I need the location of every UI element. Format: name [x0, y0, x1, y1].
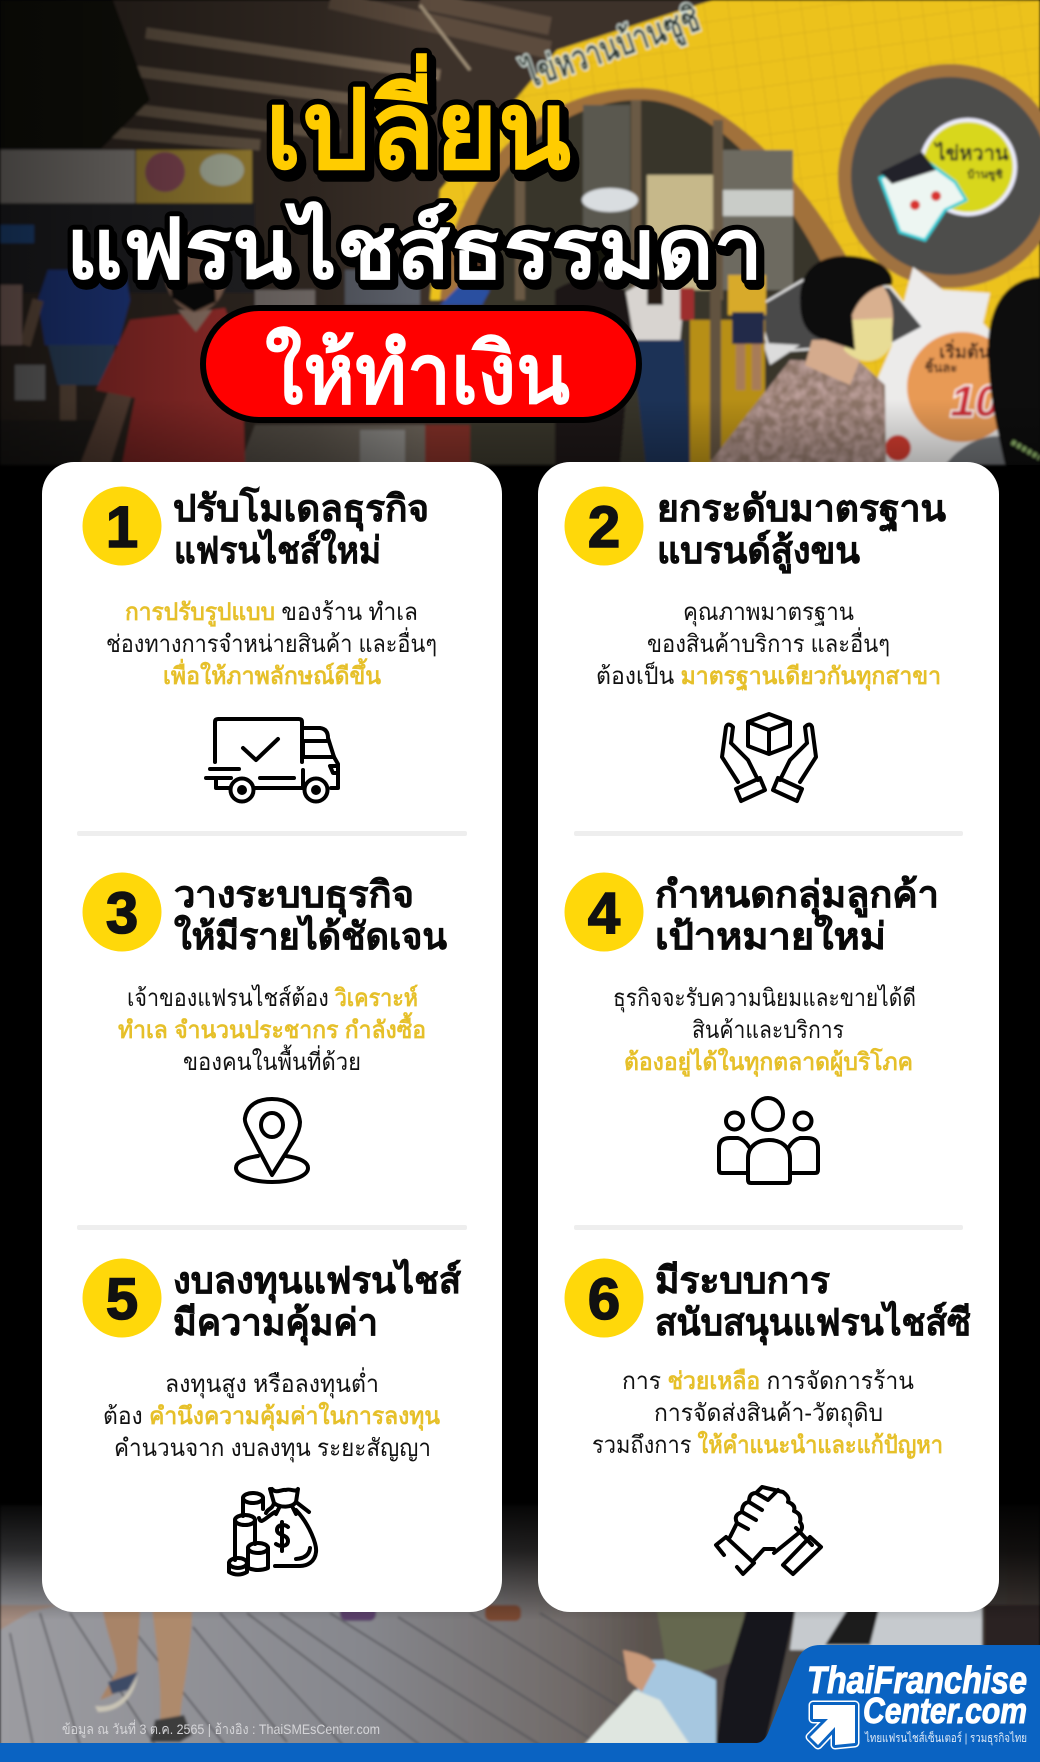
heading 6: มีระบบการ [655, 1260, 830, 1301]
number badge 6 [564, 1258, 644, 1338]
deck: walker's legs and sandals [95, 1605, 192, 1742]
number badge 1: 1 [106, 495, 138, 560]
background photo: wooden deck and legs [0, 1505, 1040, 1750]
body 4: สินค้าและบริการ [692, 1017, 844, 1044]
heading 4: กำหนดกลุ่มลูกค้า [655, 874, 939, 918]
heading 1: ปรับโมเดลธุรกิจ [173, 486, 429, 532]
body 6: การจัดส่งสินค้า-วัตถุดิบ [654, 1400, 883, 1428]
photo: yellow tiled wall [430, 0, 1040, 465]
photo: round sign: ไข่หวาน [933, 141, 1009, 165]
photo: dark haired person at right edge [945, 277, 1040, 465]
body 5: ต้อง คำนึงความคุ้มค่าในการลงทุน [103, 1401, 441, 1432]
icon: logo arrow [810, 1705, 855, 1745]
item 3 [82, 872, 447, 1182]
heading 2: แบรนด์สู้งขน [657, 530, 860, 574]
photo: man in blue [0, 270, 130, 437]
photo: arched entrance [440, 88, 860, 465]
photo: woman in yellow [728, 275, 766, 390]
number badge 6: 6 [588, 1267, 620, 1332]
body 4: ต้องอยู่ได้ในทุกตลาดผู้บริโภค [624, 1047, 913, 1078]
photo: floor [240, 425, 460, 465]
logo: ThaiFranchise Center.com [807, 1660, 1027, 1746]
heading 6: สนับสนุนแฟรนไชส์ซี [655, 1300, 971, 1346]
heading 4 [655, 874, 939, 957]
heading 3 [174, 874, 447, 957]
heading 4: เป้าหมายใหม่ [655, 914, 886, 957]
photo: cartoon standee: 10 [951, 377, 1000, 426]
item 6 [564, 1258, 971, 1574]
body 2: ของสินค้าบริการ และอื่นๆ [647, 627, 890, 658]
icon: hands holding box [722, 714, 816, 801]
photo: woman in white shirt [626, 275, 694, 465]
number badge 5 [82, 1258, 162, 1338]
photo top fade to black [0, 0, 1040, 570]
deck: right side clothing and bag [340, 1605, 1040, 1745]
title: แฟรนไชส์ธรรมดา: แฟรนไชส์ธรรมดา [66, 201, 763, 296]
body 4 [613, 984, 916, 1078]
body 5: คำนวนจาก งบลงทุน ระยะสัญญา [114, 1435, 431, 1463]
heading 3: ให้มีรายได้ชัดเจน [174, 914, 447, 957]
photo: round sign [838, 64, 1040, 288]
number badge 4 [564, 872, 644, 952]
item 2 [564, 486, 946, 801]
body 5 [103, 1367, 441, 1463]
body 1 [106, 599, 437, 690]
icon: delivery truck [206, 719, 338, 802]
body 4: ธุรกิจจะรับความนิยมและขายได้ดี [613, 984, 916, 1013]
icon: handshake [716, 1487, 821, 1574]
body 6 [592, 1368, 943, 1459]
photo: ceiling beams [80, 0, 550, 145]
title pill: ให้ทำเงิน: ให้ทำเงิน [265, 326, 570, 421]
item 5 [82, 1258, 461, 1574]
number badge 2 [564, 486, 644, 566]
body 3: ของคนในพื้นที่ด้วย [183, 1044, 361, 1076]
icon: money bag and coins [229, 1489, 316, 1574]
number badge 2: 2 [588, 495, 620, 560]
photo: interior column and wall [690, 320, 765, 465]
body 3 [118, 984, 426, 1076]
heading 3: วางระบบธุรกิจ [174, 874, 414, 918]
item 4 [564, 872, 939, 1183]
photo: cartoon standee [757, 267, 1017, 465]
number badge 3 [82, 872, 162, 952]
number badge 5: 5 [106, 1267, 138, 1332]
body 1: เพื่อให้ภาพลักษณ์ดีขึ้น [163, 657, 382, 690]
photo left shade [0, 0, 700, 467]
photo: left shop signs [0, 150, 255, 293]
body 2: คุณภาพมาตรฐาน [683, 599, 854, 627]
body 3: ทำเล จำนวนประชากร กำลังซื้อ [118, 1011, 426, 1044]
panel: left column [42, 462, 502, 1612]
icon: location pin [236, 1099, 308, 1182]
photo: other pedestrians [255, 246, 490, 465]
heading 1 [173, 486, 429, 571]
heading 2 [657, 488, 946, 574]
footer source note: ข้อมูล ณ วันที่ 3 ต.ค. 2565 | อ้างอิง : ThaiSMEsCenter.com [62, 1720, 380, 1738]
number badge 3: 3 [106, 881, 138, 946]
body 5: ลงทุนสูง หรือลงทุนต่ำ [165, 1367, 379, 1399]
photo: man in black [555, 230, 632, 465]
photo: round sign: บ้านซูชิ [967, 168, 1003, 182]
number badge 1 [82, 486, 162, 566]
item 1 [82, 486, 437, 802]
icon: group of people [719, 1098, 818, 1183]
heading 6 [655, 1260, 971, 1346]
footer bar and logo panel [0, 1645, 1040, 1762]
body 6: รวมถึงการ ให้คำแนะนำและแก้ปัญหา [592, 1430, 943, 1459]
body 3: เจ้าของแฟรนไชส์ต้อง วิเคราะห์ [127, 984, 418, 1012]
heading 1: แฟรนไชส์ใหม่ [174, 528, 381, 571]
photo: cartoon standee: ชิ้นละ [925, 357, 957, 375]
title pill: ให้ทำเงิน [203, 308, 639, 421]
body 6: การ ช่วยเหลือ การจัดการร้าน [622, 1368, 914, 1395]
photo: woman in red shirt with black mask [80, 232, 245, 465]
background photo: shop front and crowd [0, 0, 1040, 465]
heading 5 [173, 1258, 461, 1346]
photo: cartoon standee: เริ่มต้น [939, 339, 992, 362]
heading 5: งบลงทุนแฟรนไชส์ [173, 1258, 461, 1304]
heading 5: มีความคุ้มค่า [173, 1302, 378, 1346]
photo: lady with bob hair and beige mask [708, 256, 893, 465]
title: เปลี่ยน: เปลี่ยน [265, 53, 571, 192]
body 2: ต้องเป็น มาตรฐานเดียวกันทุกสาขา [596, 661, 941, 692]
body 1: การปรับรูปแบบ ของร้าน ทำเล [125, 599, 418, 627]
heading 2: ยกระดับมาตรฐาน [657, 488, 946, 532]
photo: dark awning [0, 0, 150, 150]
panel: right column [538, 462, 999, 1612]
body 2 [596, 599, 941, 692]
bottom fade from black [0, 1495, 1040, 1620]
body 1: ช่องทางการจำหน่ายสินค้า และอื่นๆ [106, 627, 437, 658]
number badge 4: 4 [588, 881, 620, 946]
